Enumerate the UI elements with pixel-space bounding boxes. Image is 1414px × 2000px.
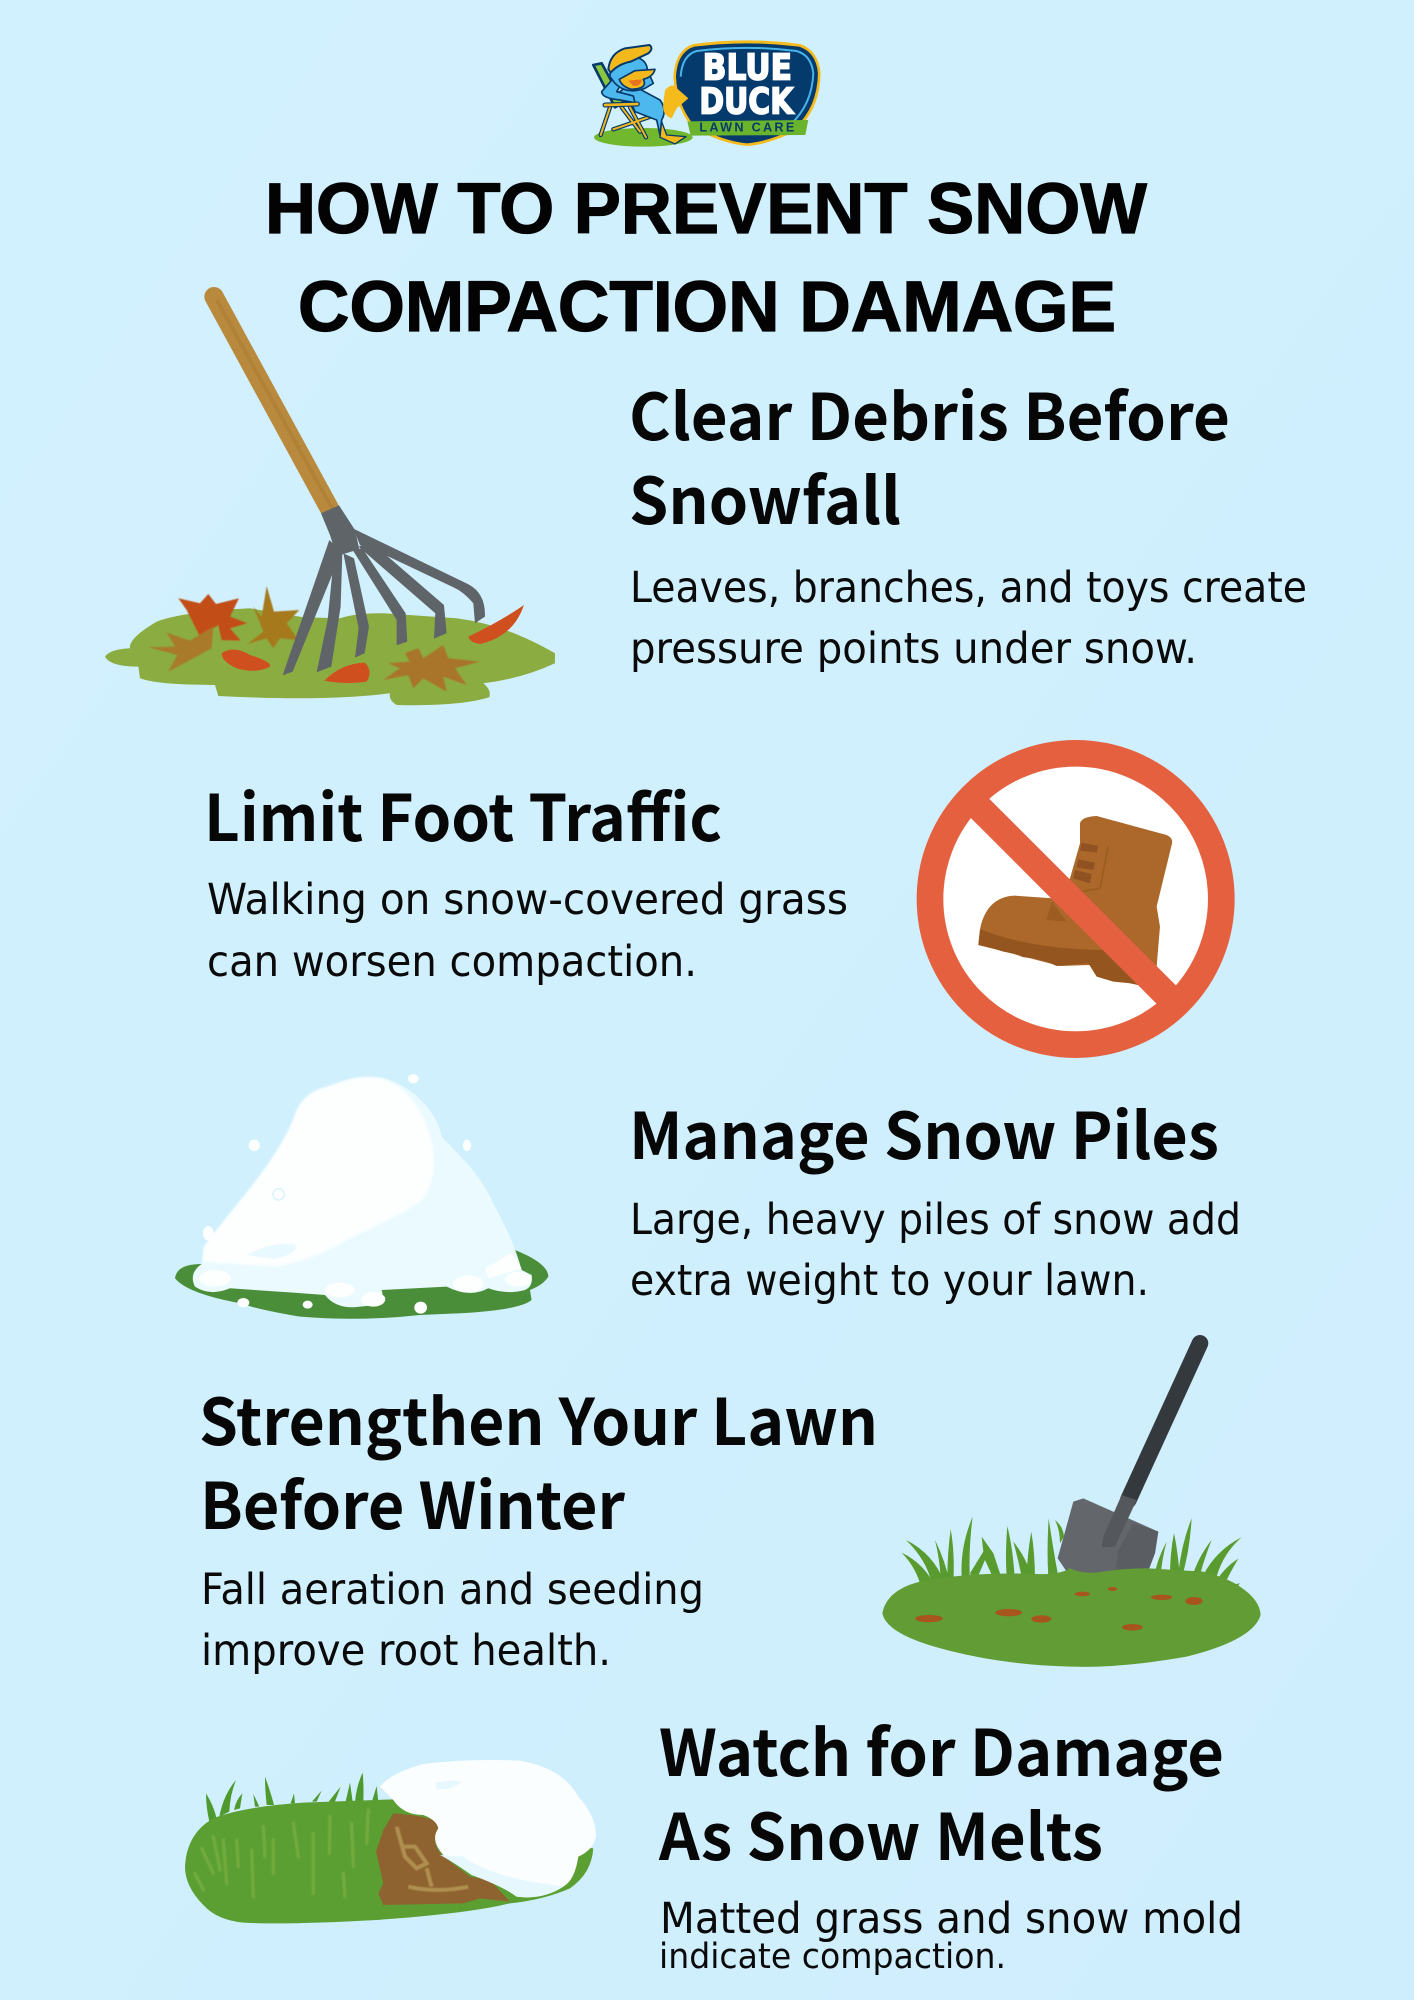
body text [659,1894,1243,1977]
heading: Limit Foot Traffic [204,768,722,860]
body text: can worsen compaction. [207,937,697,987]
body text: Matted grass and snow mold [660,1894,1243,1944]
heading: Strengthen Your Lawn [199,1372,878,1464]
heading: Snowfall [629,451,901,543]
heading: Watch for Damage [659,1703,1224,1795]
body text [207,875,848,987]
body text: Fall aeration and seeding [201,1565,704,1615]
icon: boot in prohibition sign [930,753,1221,1045]
body text [630,563,1307,674]
heading [629,367,1230,543]
icon: snow pile on grass [175,1074,548,1319]
body text: Large, heavy piles of snow add [630,1195,1241,1245]
duck illustration with lawn chair [593,45,693,147]
body text: indicate compaction. [659,1937,1006,1977]
body text: Walking on snow-covered grass [207,875,848,925]
logo wordmark second line: DUCK [699,82,795,123]
panel: watch for damage as snow melts [185,1703,1243,1977]
icon: rake on leafy grass [105,297,555,705]
icon: shovel in grass [882,1343,1261,1667]
panel: limit foot traffic [204,753,1221,1045]
heading: Clear Debris Before [629,367,1230,459]
heading [658,1703,1224,1879]
heading: Manage Snow Piles [629,1086,1219,1178]
body text [630,1195,1241,1306]
heading: Before Winter [200,1456,625,1548]
heading: As Snow Melts [658,1787,1103,1879]
lawn care banner: LAWN CARE [699,121,794,135]
title [265,170,1147,347]
body text: Leaves, branches, and toys create [630,563,1307,613]
title: COMPACTION DAMAGE [298,268,1116,347]
logo wordmark: BLUE [703,47,792,88]
panel: clear debris before snowfall [105,297,1307,705]
panel: strengthen your lawn before winter [199,1343,1261,1676]
heading [199,1372,878,1548]
shield badge [663,40,821,146]
body text [201,1565,704,1676]
body text: improve root health. [201,1626,611,1676]
body text: pressure points under snow. [630,624,1197,674]
logo: Blue Duck Lawn Care [593,40,821,147]
icon: matted grass with melting snow [185,1760,596,1923]
title: HOW TO PREVENT SNOW [265,170,1147,249]
panel: manage snow piles [175,1074,1241,1319]
body text: extra weight to your lawn. [630,1256,1149,1306]
